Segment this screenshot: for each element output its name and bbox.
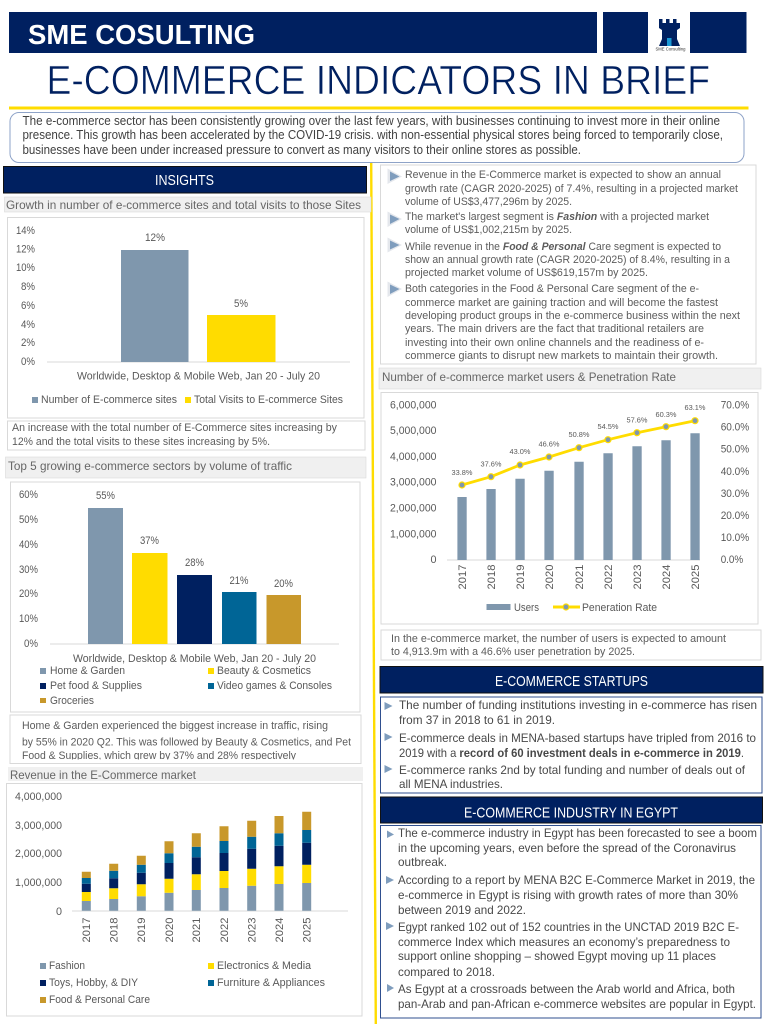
panel: market revenue bullets: show an annual growth rate (CAGR 2020-2025) of 8.4%, resulting in a [405,254,731,266]
heading: e-commerce industry in Egypt: E-COMMERCE INDUSTRY IN EGYPT [464,804,678,822]
combo chart: users and penetration rate: 57.6% [627,416,648,425]
panel: market revenue bullets: projected market volume of US$619,157m by 2025. [405,267,648,279]
panel: startups bullets: E-commerce ranks 2nd by total funding and number of deals out of [399,763,746,777]
heading: insights: INSIGHTS [155,172,214,189]
combo chart: users and penetration rate: 0 [430,554,436,566]
bar chart: top 5 sectors: 30% [19,564,38,576]
bar chart: top 5 sectors: Worldwide, Desktop & Mobile Web, Jan 20 - July 20 [73,653,316,665]
combo chart: users and penetration rate: 2,000,000 [390,502,436,514]
combo chart: users and penetration rate: 54.5% [598,422,619,431]
bar chart: top 5 sectors: 0% [24,638,38,650]
intro text box [10,112,744,162]
bar chart: sites and visits: Number of E-commerce sites [41,394,177,406]
combo chart: users and penetration rate: 2018 [486,565,498,589]
bar chart: top 5 sectors: Video games & Consoles [217,680,332,692]
bar chart: top 5 sectors: 20% [19,588,38,600]
combo chart: users and penetration rate: Peneration Rate [582,602,657,614]
icon: bullet arrows [388,168,402,297]
panel: market revenue bullets [380,165,756,364]
combo chart: users and penetration rate: 2020 [544,565,556,589]
subheading: top 5 sectors: Top 5 growing e-commerce sectors by volume of traffic [8,459,292,473]
combo chart: users and penetration rate: 20.0% [721,510,749,522]
combo chart: users and penetration rate: 2022 [603,565,615,589]
heading: e-commerce startups: E-COMMERCE STARTUPS [495,673,648,690]
combo chart: users and penetration rate: Users [514,602,539,614]
panel: Egypt bullets: between 2019 and 2022. [398,903,526,917]
bar chart: sites and visits: 6% [21,300,35,312]
caption: users: In the e-commerce market, the number of users is expected to amount [391,633,727,645]
subheading: revenue [8,767,363,782]
stacked bar chart: revenue [6,784,362,1016]
stacked bar chart: revenue: Furniture & Appliances [217,977,325,989]
combo chart: users and penetration rate: 4,000,000 [390,451,436,463]
panel: market revenue bullets: years. The main drivers are the fact that traditional retailers are [405,323,704,335]
series: food and personal care [82,812,311,878]
bar chart: sites and visits: Total Visits to E-commerce Sites [194,394,343,406]
panel: Egypt bullets: in the upcoming years, even before the spread of the Coronavirus [398,841,736,855]
bar chart: sites and visits: 10% [16,262,35,274]
stacked bar chart: revenue: 2023 [246,918,258,942]
combo chart: users and penetration rate: 10.0% [721,532,749,544]
combo chart: users and penetration rate: 1,000,000 [390,528,436,540]
panel: Egypt bullets: The e-commerce industry in Egypt has been forecasted to see a boom [398,826,757,840]
combo chart: users and penetration rate: 30.0% [721,488,749,500]
bar chart: top 5 sectors: Pet food & Supplies [50,680,142,692]
stacked bar chart: revenue: 0 [56,906,62,918]
panel: Egypt bullets: outbreak. [398,855,447,869]
combo chart: users and penetration rate: 60.0% [721,421,749,433]
stacked bar chart: revenue: 2017 [81,918,93,942]
stacked bar chart: revenue: Electronics & Media [217,960,312,972]
series: penetration rate line [459,418,698,488]
panel: Egypt bullets: commerce Index which measures an economy’s preparedness to [398,935,730,949]
icon: bullet arrows [384,702,392,773]
panel: Egypt bullets: pan-Arab and pan-African e-commerce websites are popular in Egypt. [398,997,756,1011]
bar chart: sites and visits: 2% [21,337,35,349]
combo chart: users and penetration rate: 63.1% [685,403,706,412]
subheading: users and penetration: Number of e-commerce market users & Penetration Rate [382,370,676,384]
caption: sites and visits: 12% and the total visits to these sites increasing by 5%. [12,436,270,448]
subheading: users and penetration [379,368,761,389]
combo chart: users and penetration rate: 3,000,000 [390,477,436,489]
stacked bar chart: revenue: Toys, Hobby, & DIY [49,977,138,989]
series: electronics and media [82,865,311,901]
subheading: growth in sites: Growth in number of e-commerce sites and total visits to those Sites [6,198,361,212]
stacked bar chart: revenue: 4,000,000 [15,791,62,803]
bar chart: sites and visits: Worldwide, Desktop & Mobile Web, Jan 20 - July 20 [77,370,320,382]
combo chart: users and penetration rate: 2021 [574,565,586,589]
stacked bar chart: revenue: 2025 [302,918,314,942]
stacked bar chart: revenue: 2021 [191,918,203,942]
bar chart: sites and visits [8,218,364,418]
combo chart: users and penetration rate: 2024 [661,565,673,589]
bar chart: top 5 sectors: 40% [19,539,38,551]
combo chart: users and penetration rate: 2019 [515,565,527,589]
stacked bar chart: revenue: 1,000,000 [15,877,62,889]
stacked bar chart: revenue: 2019 [136,918,148,942]
panel: market revenue bullets: commerce giants to disrupt new markets to maintain their growth. [405,350,718,362]
combo chart: users and penetration rate: 37.6% [481,460,502,469]
combo chart: users and penetration rate: 2025 [690,565,702,589]
panel: startups bullets: E-commerce deals in MENA-based startups have tripled from 2016 to [399,731,756,745]
caption: users: to 4,913.9m with a 46.6% user penetration by 2025. [391,646,635,658]
caption: top 5 sectors: by 55% in 2020 Q2. This was followed by Beauty & Cosmetics, and Pet [22,736,352,748]
bar chart: sites and visits: 12% [145,232,165,244]
stacked bar chart: revenue: 2022 [219,918,231,942]
heading: insights [4,166,366,193]
bar chart: top 5 sectors: Groceries [50,695,94,707]
caption: top 5 sectors: Food & Supplies, which grew by 37% and 28% respectively [22,750,296,762]
panel: market revenue bullets: developing product groups in the e-commerce business within the next [405,310,741,322]
bar chart: sites and visits: 5% [234,298,248,310]
combo chart: users and penetration rate: 40.0% [721,466,749,478]
bar chart: top 5 sectors: 55% [96,490,115,502]
intro text box: businesses have been under increased pressure to convert as many visitors to their online stores as possible. [22,142,581,157]
bar chart: sites and visits: 14% [16,225,35,237]
icon: bullet arrows [386,830,394,992]
bar chart: top 5 sectors [10,482,360,712]
combo chart: users and penetration rate: 46.6% [539,439,560,448]
bar chart: top 5 sectors: 37% [140,535,159,547]
panel: startups bullets [380,697,762,793]
heading: e-commerce industry in Egypt [380,797,762,823]
stacked bar chart: revenue: 3,000,000 [15,820,62,832]
bar chart: sites and visits: 4% [21,319,35,331]
panel: Egypt bullets: support online shopping – showed Egypt moving up 11 places [398,949,716,963]
series: furniture and appliances [82,830,311,884]
company name: SME COSULTING [28,19,255,50]
panel: Egypt bullets: According to a report by MENA B2C E-Commerce Market in 2019, the [398,873,755,887]
bar chart: sites and visits: 8% [21,281,35,293]
combo chart: users and penetration rate: 6,000,000 [390,399,436,411]
series: users bars [457,433,700,560]
bar chart: top 5 sectors: 60% [19,489,38,501]
stacked bar chart: revenue: 2018 [108,918,120,942]
combo chart: users and penetration rate: 50.8% [569,430,590,439]
bar chart: top 5 sectors: Beauty & Cosmetics [217,665,311,677]
title: E-COMMERCE INDICATORS IN BRIEF [46,57,710,103]
heading: e-commerce startups [380,666,763,693]
combo chart: users and penetration rate: 0.0% [721,554,743,566]
bar chart: top 5 sectors: 20% [274,578,293,590]
icon: castle tower logo [656,19,686,52]
panel: Egypt bullets: As Egypt at a crossroads between the Arab world and Africa, both [398,982,735,996]
series: toys, hobby and DIY [82,843,311,892]
panel: market revenue bullets: volume of US$1,002,215m by 2025. [405,224,572,236]
caption: users [381,630,761,660]
series: fashion [82,883,311,911]
caption: top 5 sectors: Home & Garden experienced the biggest increase in traffic, rising [22,720,328,732]
panel: startups bullets: all MENA industries. [399,777,503,791]
bar chart: top 5 sectors: Home & Garden [50,665,125,677]
panel: market revenue bullets: While revenue in the Food & Personal Care segment is expected to [405,241,721,253]
combo chart: users and penetration rate: 60.3% [656,410,677,419]
combo chart: users and penetration rate: 43.0% [510,447,531,456]
panel: market revenue bullets: commerce market are gaining traction and will become the fastest [405,297,719,309]
stacked bar chart: revenue: Food & Personal Care [49,994,150,1006]
panel: startups bullets: 2019 with a record of 60 investment deals in e-commerce in 2019. [399,746,744,760]
combo chart: users and penetration rate: 2017 [457,565,469,589]
icon: castle tower logo: SME Consulting [656,46,686,52]
panel: Egypt bullets [380,826,761,1018]
panel: startups bullets: from 37 in 2018 to 61 in 2019. [399,713,555,727]
subheading: revenue: Revenue in the E-Commerce market [10,768,197,782]
panel: market revenue bullets: growth rate (CAGR 2020-2025) of 7.4%, resulting in a projected market [405,183,739,195]
caption: sites and visits [8,421,365,450]
combo chart: users and penetration rate: 2023 [632,565,644,589]
panel: startups bullets: The number of funding institutions investing in e-commerce has risen [399,698,757,712]
stacked bar chart: revenue: 2,000,000 [15,848,62,860]
panel: market revenue bullets: Both categories in the Food & Personal Care segment of the e- [405,283,699,295]
subheading: top 5 sectors [6,457,366,478]
panel: Egypt bullets: e-commerce in Egypt is rising with growth rates of more than 30% [398,888,738,902]
combo chart: users and penetration rate: 5,000,000 [390,425,436,437]
combo chart: users and penetration rate: 50.0% [721,443,749,455]
stacked bar chart: revenue: 2020 [164,918,176,942]
panel: market revenue bullets: investing into their own online channels and the readiness of e- [405,337,704,349]
bar chart: sites and visits: 12% [16,244,35,256]
bar chart: top 5 sectors: 21% [230,575,249,587]
stacked bar chart: revenue: Fashion [49,960,85,972]
panel: market revenue bullets: The market's largest segment is Fashion with a projected market [405,211,710,223]
panel: market revenue bullets: Revenue in the E-Commerce market is expected to show an annual [405,169,721,181]
combo chart: users and penetration rate: 33.8% [452,468,473,477]
bar chart: sites and visits: 0% [21,356,35,368]
combo chart: users and penetration rate: 70.0% [721,399,749,411]
combo chart: users and penetration rate [381,392,758,624]
panel: Egypt bullets: Egypt ranked 102 out of 152 countries in the UNCTAD 2019 B2C E- [398,920,739,934]
caption: sites and visits: An increase with the total number of E-Commerce sites increasing by [12,422,337,434]
bar chart: top 5 sectors: 50% [19,514,38,526]
panel: Egypt bullets: compared to 2018. [398,965,495,979]
panel: market revenue bullets: volume of US$3,477,296m by 2025. [405,196,572,208]
caption: top 5 sectors [10,715,361,764]
header banner [9,12,746,53]
bar chart: top 5 sectors: 10% [19,613,38,625]
bar chart: top 5 sectors: 28% [185,557,204,569]
stacked bar chart: revenue: 2024 [274,918,286,942]
